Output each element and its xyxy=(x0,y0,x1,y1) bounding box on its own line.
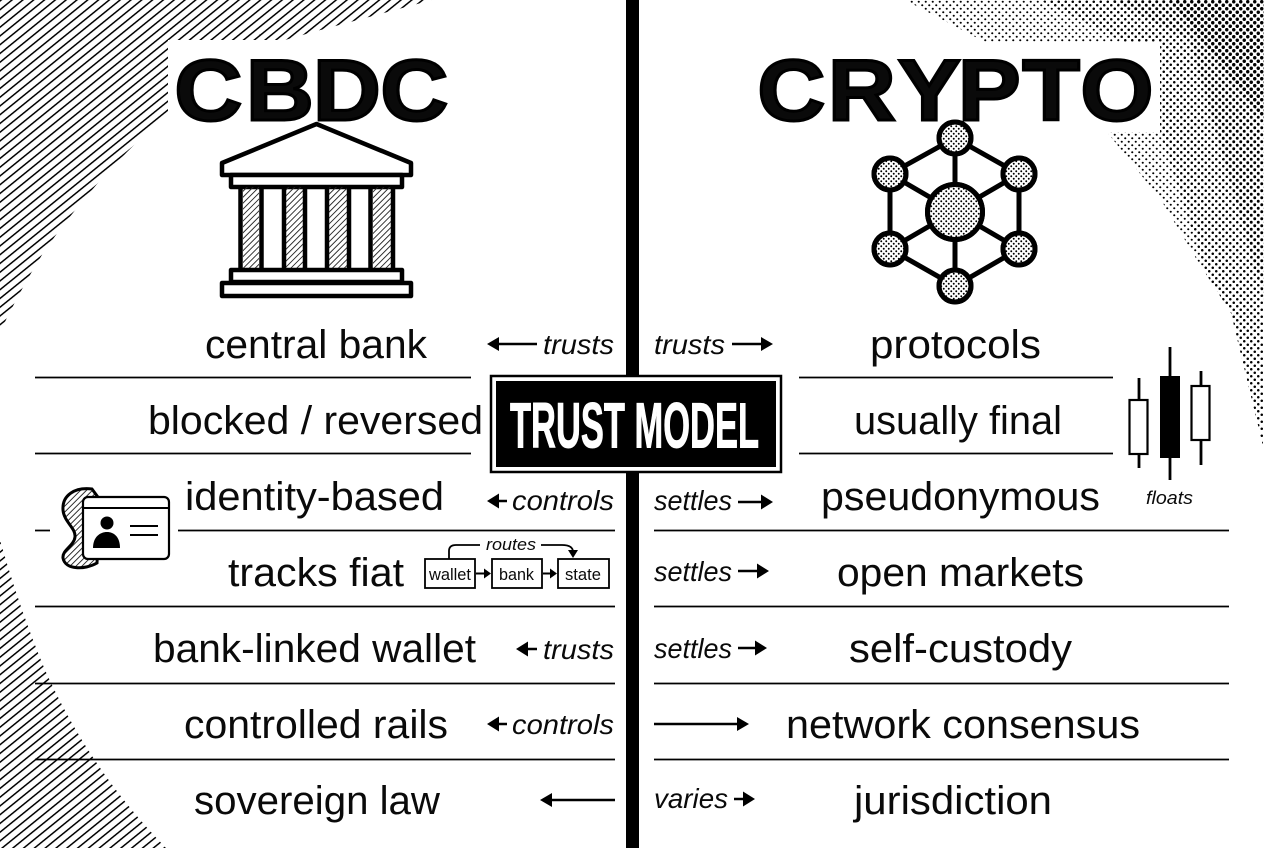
heading: CBDC: CBDC xyxy=(175,44,448,139)
right relation labels with arrows xyxy=(654,329,773,814)
icon: candlestick chart with floats label xyxy=(1130,347,1210,508)
row divider lines, left column xyxy=(35,378,615,760)
row divider lines, right column xyxy=(654,378,1229,760)
background: diagonal hatching top left xyxy=(0,0,432,332)
icon: identity card with hatched blob xyxy=(63,489,169,568)
center divider bar xyxy=(626,0,639,848)
icon: central bank building xyxy=(222,124,411,296)
heading: CRYPTO: CRYPTO xyxy=(758,44,1153,139)
right column labels: usually final xyxy=(854,399,1062,443)
badge: TRUST MODEL: TRUST MODEL xyxy=(510,390,759,462)
background: halftone dots top right xyxy=(900,0,1264,460)
right relation labels with arrows: trusts xyxy=(654,329,725,360)
right column labels: network consensus xyxy=(786,703,1140,747)
left relation labels with arrows: trusts xyxy=(543,329,614,360)
left column labels: tracks fiat xyxy=(228,551,404,595)
title backing: CRYPTO xyxy=(750,42,1160,132)
diagram: wallet to bank to state routing: bank xyxy=(499,565,534,584)
left column labels: identity-based xyxy=(185,475,444,519)
diagram: wallet to bank to state routing: wallet xyxy=(428,565,471,584)
diagram: wallet to bank to state routing: state xyxy=(565,565,601,584)
diagram: wallet to bank to state routing: routes xyxy=(486,535,537,554)
icon: candlestick chart with floats label: floats xyxy=(1146,488,1193,508)
left relation labels with arrows: trusts xyxy=(543,634,614,665)
diagram: wallet to bank to state routing xyxy=(425,535,609,588)
right column labels: protocols xyxy=(870,323,1041,367)
icon: crypto network graph xyxy=(874,122,1035,302)
left column labels: controlled rails xyxy=(184,703,448,747)
right relation labels with arrows: settles xyxy=(654,633,732,664)
right column labels: jurisdiction xyxy=(853,779,1052,823)
title backing: CBDC xyxy=(168,40,468,130)
left relation labels with arrows: controls xyxy=(512,709,614,740)
right column labels: self-custody xyxy=(849,627,1072,671)
left relation labels with arrows xyxy=(487,329,615,807)
right relation labels with arrows: settles xyxy=(654,485,732,516)
background: diagonal hatching bottom left xyxy=(0,540,166,848)
right relation labels with arrows: settles xyxy=(654,556,732,587)
right column labels xyxy=(786,323,1140,823)
left column labels: central bank xyxy=(205,323,428,367)
left column labels: sovereign law xyxy=(194,779,440,823)
badge: TRUST MODEL xyxy=(491,376,781,472)
right column labels: open markets xyxy=(837,551,1084,595)
left relation labels with arrows: controls xyxy=(512,485,614,516)
right column labels: pseudonymous xyxy=(821,475,1100,519)
right relation labels with arrows: varies xyxy=(654,783,728,814)
left column labels: blocked / reversed xyxy=(148,399,483,443)
left column labels: bank-linked wallet xyxy=(153,627,476,671)
left column labels xyxy=(148,323,483,823)
